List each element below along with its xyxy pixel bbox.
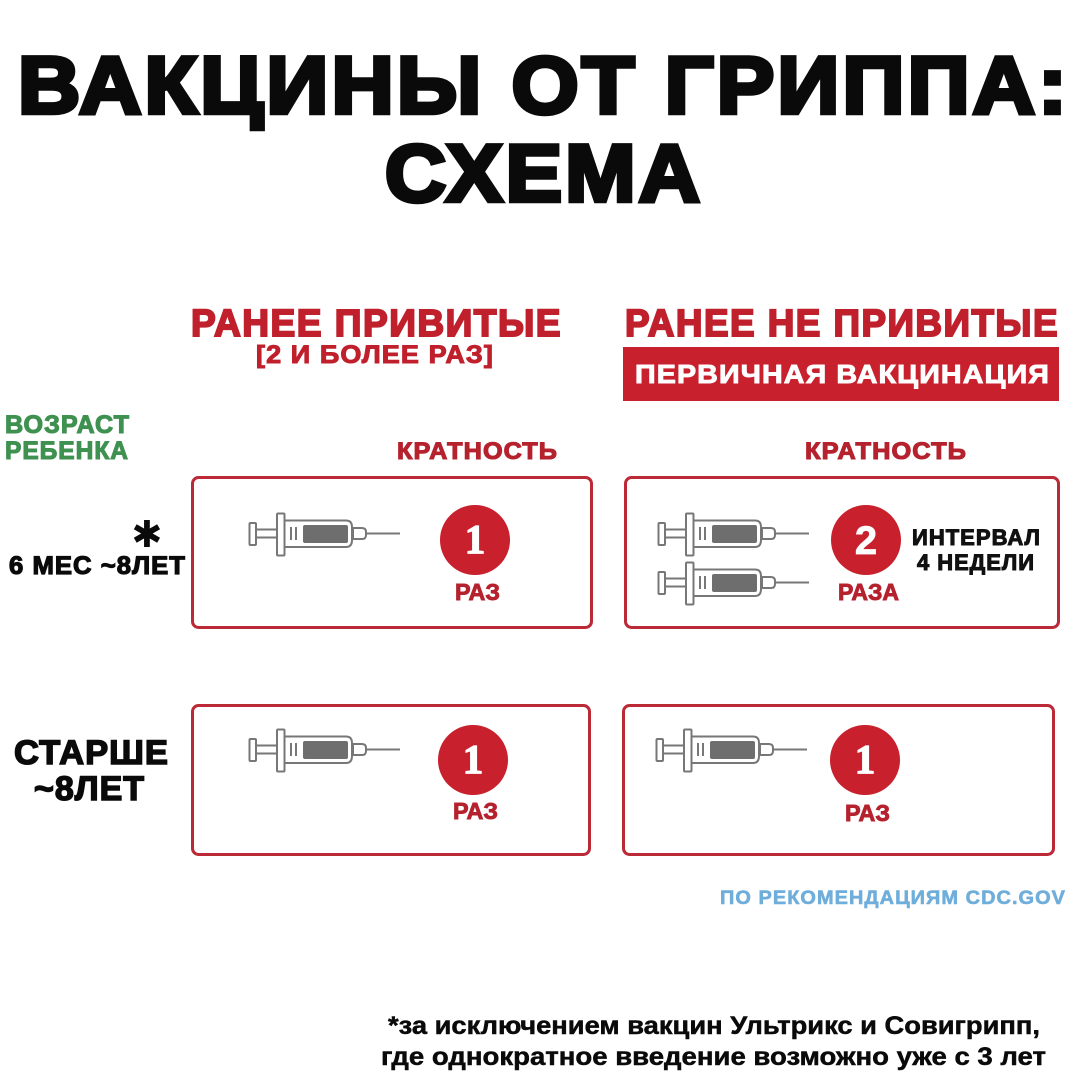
heading: not previously vaccinated: ПЕРВИЧНАЯ ВАКЦИНАЦИЯ: [635, 359, 1050, 389]
dose badge: 1: [440, 505, 510, 575]
dose badge: 2: 2: [855, 519, 877, 563]
row label: older than 8 years: СТАРШЕ: [14, 734, 169, 772]
label: child age: [5, 411, 130, 465]
row label: older than 8 years: [14, 734, 169, 808]
column label: multiplicity left: КРАТНОСТЬ: [397, 438, 558, 465]
dose label: РАЗ: [455, 579, 500, 605]
panel: older, vaccinated: [192, 706, 590, 854]
dose badge: 1: 1: [855, 736, 875, 782]
asterisk: ✱: [131, 513, 163, 556]
icon: first syringe: [658, 514, 809, 556]
title: ВАКЦИНЫ ОТ ГРИППА:: [18, 41, 1070, 131]
panel: young, not vaccinated: [626, 478, 1058, 628]
footnote: *за исключением вакцин Ультрикс и Совигрипп,: [388, 1012, 1040, 1040]
dose badge: 1: [438, 725, 508, 795]
column label: multiplicity right: КРАТНОСТЬ: [805, 438, 967, 465]
interval note: ИНТЕРВАЛ: [912, 525, 1041, 550]
panel: older, not vaccinated: [624, 706, 1054, 854]
heading: not previously vaccinated: РАНЕЕ НЕ ПРИВИТЫЕ: [625, 303, 1059, 345]
icon: second syringe: [658, 562, 809, 604]
icon: syringe: [656, 730, 807, 772]
interval note: 4 НЕДЕЛИ: [917, 550, 1035, 575]
dose badge: 1: 1: [465, 516, 485, 562]
footnote: где однократное введение возможно уже с 3 лет: [381, 1043, 1046, 1071]
label: child age: РЕБЕНКА: [5, 437, 129, 465]
icon: syringe: [250, 730, 400, 772]
title: СХЕМА: [385, 129, 703, 219]
panel: young, vaccinated: [192, 478, 592, 628]
dose label: РАЗ: [845, 800, 890, 826]
heading: previously vaccinated: РАНЕЕ ПРИВИТЫЕ: [191, 303, 562, 345]
dose badge: 1: 1: [463, 736, 483, 782]
heading: not previously vaccinated: [623, 303, 1059, 401]
row label: 6 months to 8 years: 6 МЕС ~8ЛЕТ: [9, 552, 186, 580]
source note: ПО РЕКОМЕНДАЦИЯМ CDC.GOV: [720, 888, 1066, 909]
interval note: [912, 525, 1041, 575]
title: [18, 41, 1070, 219]
footnote: [381, 1012, 1046, 1071]
row label: older than 8 years: ~8ЛЕТ: [34, 770, 145, 808]
label: child age: ВОЗРАСТ: [5, 411, 130, 439]
dose badge: 2: [831, 505, 901, 575]
dose label: РАЗ: [453, 798, 498, 824]
dose label: РАЗА: [838, 579, 899, 605]
heading: previously vaccinated: [2 И БОЛЕЕ РАЗ]: [256, 341, 494, 369]
dose badge: 1: [830, 725, 900, 795]
icon: syringe: [250, 514, 400, 556]
heading: previously vaccinated: [191, 303, 562, 369]
